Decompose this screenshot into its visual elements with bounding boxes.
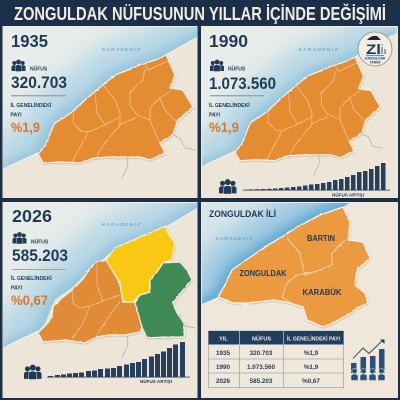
- district labels: [240, 234, 342, 297]
- panel: 2026: [0, 190, 212, 398]
- panel: 1935: [0, 20, 212, 198]
- map region: Karabük (green): [135, 262, 192, 338]
- map region: Bartın (yellow): [106, 226, 175, 302]
- share label: İL GENELİNDEKİ: [10, 102, 52, 109]
- data table: İL GENELİNDEKİ PAYI: [287, 336, 340, 342]
- population value: 320.703: [11, 74, 67, 92]
- share value: %1,9: [11, 119, 40, 135]
- data table: %1,9: [304, 364, 319, 371]
- map region: district lines: [72, 262, 120, 338]
- population label: NÜFUS: [30, 66, 48, 72]
- data table: %1,9: [304, 350, 319, 357]
- panel: Zonguldak province: [198, 199, 398, 398]
- map: 1990 districts: [235, 57, 380, 161]
- year: 2026: [12, 206, 52, 226]
- data table: %0,67: [302, 378, 320, 385]
- map: three provinces: [218, 207, 370, 327]
- icon: growth bars with people: [351, 340, 385, 380]
- share label: PAYI: [209, 112, 221, 118]
- data table: 1990: [216, 364, 230, 371]
- icon: people: [210, 60, 224, 72]
- chart label: NÜFUS ARTIŞI: [332, 192, 364, 198]
- district labels: BARTIN: [307, 234, 335, 243]
- share value: %1,9: [209, 119, 239, 135]
- share label: İL GENELİNDEKİ: [11, 275, 52, 282]
- logo: Zonguldak Tarihi: [358, 32, 392, 66]
- panel: 1990: [196, 23, 398, 198]
- sea label: KARADENİZ: [102, 221, 141, 228]
- population label: NÜFUS: [31, 238, 49, 246]
- share label: PAYI: [10, 112, 22, 118]
- logo: Zonguldak Tarihi: Zl: [366, 41, 381, 57]
- sea label: KARADENİZ: [298, 46, 339, 53]
- share label: PAYI: [11, 286, 23, 292]
- year: 1990: [209, 31, 248, 51]
- icon: people: [219, 179, 236, 194]
- data table: 1935: [216, 350, 230, 357]
- map regions: [38, 226, 192, 343]
- map: 1935 districts: [38, 55, 193, 163]
- sea label: KARADENİZ: [216, 235, 254, 242]
- data table: YIL: [219, 336, 228, 342]
- population value: 585.203: [12, 247, 68, 265]
- year: 1935: [11, 31, 48, 51]
- sea label: KARADENİZ: [102, 46, 141, 53]
- chart label: NÜFUS ARTIŞI: [140, 378, 172, 384]
- data table: [208, 331, 344, 388]
- data table: 1.073.560: [247, 364, 276, 371]
- population label: NÜFUS: [228, 66, 246, 72]
- data table: 585.203: [250, 378, 273, 385]
- logo: Zonguldak Tarihi: TARİHİ: [370, 60, 380, 64]
- data table: NÜFUS: [252, 336, 271, 342]
- district labels: KARABÜK: [302, 288, 342, 297]
- bar chart: population growth: [243, 163, 390, 190]
- bar chart: population growth: [47, 342, 190, 378]
- icon: people: [12, 60, 26, 72]
- data table: 320.703: [250, 350, 273, 357]
- population value: 1.073.560: [209, 75, 276, 93]
- subtitle: ZONGULDAK İLİ: [209, 209, 276, 219]
- icon: people: [24, 365, 42, 380]
- data table: 2026: [216, 378, 230, 385]
- logo: Zonguldak Tarihi: ZONGULDAK: [364, 56, 386, 60]
- share value: %0,67: [11, 292, 48, 308]
- map region: Zonguldak (orange): [38, 260, 142, 343]
- share label: İL GENELİNDEKİ: [209, 102, 250, 109]
- district labels: ZONGULDAK: [240, 269, 287, 278]
- icon: people: [12, 232, 26, 244]
